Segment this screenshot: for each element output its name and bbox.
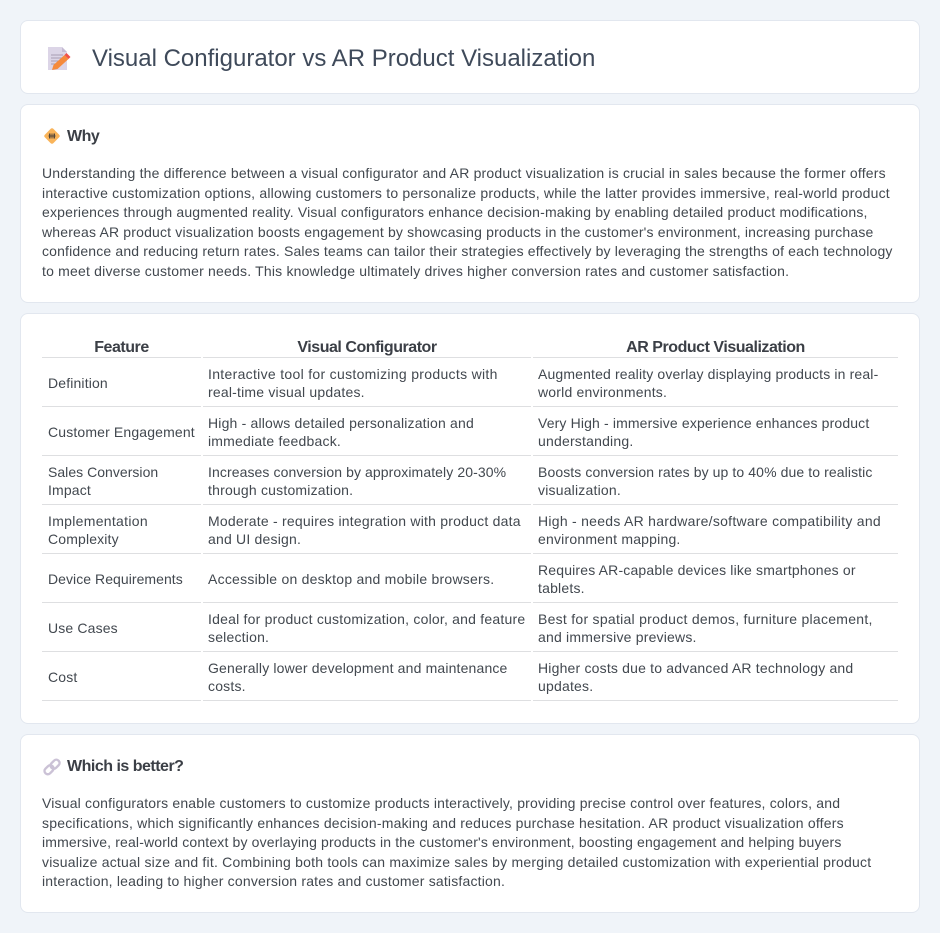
table row: cost: Generally lower development and maintenance	[208, 660, 508, 676]
table row: device requirements: Device Requirements	[48, 571, 183, 587]
table row: sales conversion impact: visualization.	[538, 482, 621, 498]
text block: which is better: Visual configurators enable customers to customize products interactively, providing precise control over features, colors, and	[42, 795, 840, 811]
table row: customer engagement: High - allows detailed personalization and	[208, 415, 474, 431]
text block: which is better: interaction, leading to higher conversion rates and customer satisfaction.	[42, 873, 505, 889]
table row: sales conversion impact: Increases conversion by approximately 20-30%	[208, 464, 506, 480]
table row: definition	[42, 366, 898, 407]
table row: implementation complexity: environment mapping.	[538, 531, 681, 547]
table row: customer engagement	[42, 415, 898, 456]
icon: chain link	[43, 758, 61, 776]
table row: device requirements: tablets.	[538, 580, 585, 596]
table row: customer engagement: Very High - immersive experience enhances product	[538, 415, 869, 431]
table header: AR Product Visualization	[626, 339, 805, 356]
text block: why: experiences through augmented reality. Visual configurators enhance decision-making by enabling detailed product modifications,	[42, 204, 868, 220]
table row: cost: updates.	[538, 678, 593, 694]
table header	[42, 339, 898, 358]
table row: sales conversion impact: Boosts conversion rates by up to 40% due to realistic	[538, 464, 872, 480]
table row: implementation complexity: Complexity	[48, 531, 119, 547]
table row: sales conversion impact: through customization.	[208, 482, 353, 498]
table row: implementation complexity: High - needs AR hardware/software compatibility and	[538, 513, 881, 529]
panel: why	[20, 104, 920, 303]
heading: why: Why	[67, 128, 99, 145]
table row: cost: Higher costs due to advanced AR technology and	[538, 660, 853, 676]
table row: use cases: and immersive previews.	[538, 629, 697, 645]
table row: implementation complexity	[42, 513, 898, 554]
table row: device requirements: Requires AR-capable devices like smartphones or	[538, 562, 856, 578]
text block: why: confidence and reducing return rates. Sales teams can tailor their strategies effectively by leveraging the strengths of each technology	[42, 243, 893, 259]
table row: implementation complexity: Moderate - requires integration with product data	[208, 513, 521, 529]
table row: use cases	[42, 611, 898, 652]
table row: definition: Definition	[48, 375, 108, 391]
text block: why: to meet diverse customer needs. This knowledge ultimately drives higher conversion rates and customer satisfaction.	[42, 263, 789, 279]
heading: which is better: Which is better?	[67, 758, 183, 775]
table header: Visual Configurator	[297, 339, 437, 356]
table row: sales conversion impact: Impact	[48, 482, 91, 498]
table row: use cases: Ideal for product customization, color, and feature	[208, 611, 525, 627]
table row: customer engagement: understanding.	[538, 433, 633, 449]
table row: customer engagement: immediate feedback.	[208, 433, 341, 449]
table row: use cases: Best for spatial product demos, furniture placement,	[538, 611, 873, 627]
panel: which is better	[20, 734, 920, 913]
icon: document with pencil	[48, 47, 70, 70]
table row: use cases: selection.	[208, 629, 269, 645]
table row: sales conversion impact: Sales Conversion	[48, 464, 158, 480]
table header: Feature	[94, 339, 149, 356]
text block: which is better: visualize actual size and fit. Combining both tools can maximize sales by merging detailed customization with experiential product	[42, 854, 871, 870]
table row: cost: Cost	[48, 669, 77, 685]
table row: definition: Augmented reality overlay displaying products in real-	[538, 366, 878, 382]
table row: cost	[42, 660, 898, 701]
table row: definition: world environments.	[538, 384, 667, 400]
text block: why: Understanding the difference between a visual configurator and AR product visualization is crucial in sales because the former offers	[42, 165, 886, 181]
panel: title	[20, 20, 920, 94]
table row: customer engagement: Customer Engagement	[48, 424, 195, 440]
table row: use cases: Use Cases	[48, 620, 118, 636]
table row: device requirements: Accessible on desktop and mobile browsers.	[208, 571, 494, 587]
text block: which is better: specifications, which significantly enhances decision-making and reduces purchase hesitation. AR product visualization offers	[42, 815, 844, 831]
table row: implementation complexity: Implementation	[48, 513, 148, 529]
text block: why: interactive customization options, allowing customers to personalize products, while the latter provides immersive, real-world product	[42, 185, 890, 201]
text block: why	[42, 165, 893, 279]
title: Visual Configurator vs AR Product Visualization	[92, 45, 595, 72]
table row: definition: real-time visual updates.	[208, 384, 365, 400]
table row: definition: Interactive tool for customizing products with	[208, 366, 498, 382]
icon: diamond sign	[44, 128, 60, 144]
text block: which is better: immersive, real-world context by overlaying products in the customer's environment, boosting engagement and helping buyers	[42, 834, 842, 850]
table row: cost: costs.	[208, 678, 246, 694]
panel: comparison table	[20, 313, 920, 724]
table row: device requirements	[42, 562, 898, 603]
text block: which is better	[42, 795, 872, 889]
text block: why: whereas AR product visualization boosts engagement by showcasing products in the customer's environment, increasing purchase	[42, 224, 874, 240]
table row: implementation complexity: and UI design.	[208, 531, 301, 547]
table row: sales conversion impact	[42, 464, 898, 505]
